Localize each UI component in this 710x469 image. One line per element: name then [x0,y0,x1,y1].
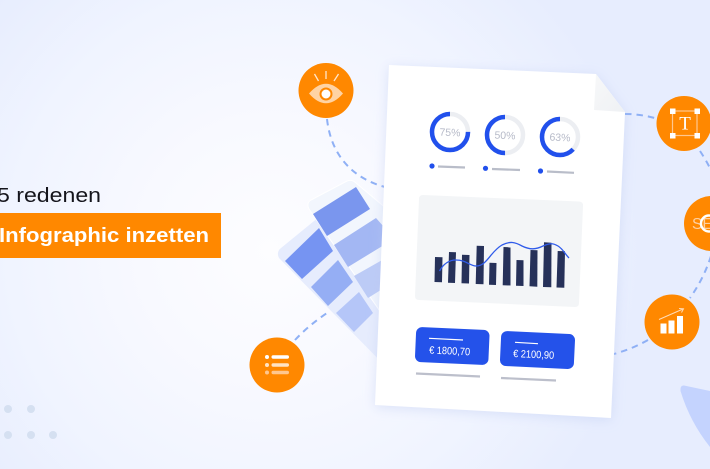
icon: text frame [656,96,710,151]
icon: growth chart [644,294,700,350]
dashed connector lines [295,114,710,354]
donut chart 63%: 63% [549,132,571,144]
donut legends [429,163,574,174]
donut chart 75% [432,114,468,150]
document page [375,65,625,418]
chart panel [415,195,583,307]
donut chart 50%: 50% [494,130,516,142]
title banner [0,213,221,258]
trend line [440,242,569,271]
swatch cards [278,180,400,376]
donut chart 63% [542,119,578,155]
icon: text frame: T [679,114,691,134]
value card 1 [415,327,490,365]
value card 2: € 2100,90 [513,348,554,362]
title banner: Infographic inzetten [0,225,209,247]
icon: list [250,338,304,392]
value card 2 [500,331,575,369]
page fold [594,74,625,112]
corner shape bottom right [680,385,710,447]
caption lines [416,374,556,380]
icon: eye [298,63,354,118]
value card 1: € 1800,70 [429,345,470,358]
front swatch card [308,180,400,340]
bar chart [434,242,565,288]
donut chart 50% [487,117,523,153]
icon: SEO [684,196,710,251]
decorative dots [4,405,57,439]
donut chart 75%: 75% [439,127,461,139]
back swatch card [278,208,395,376]
